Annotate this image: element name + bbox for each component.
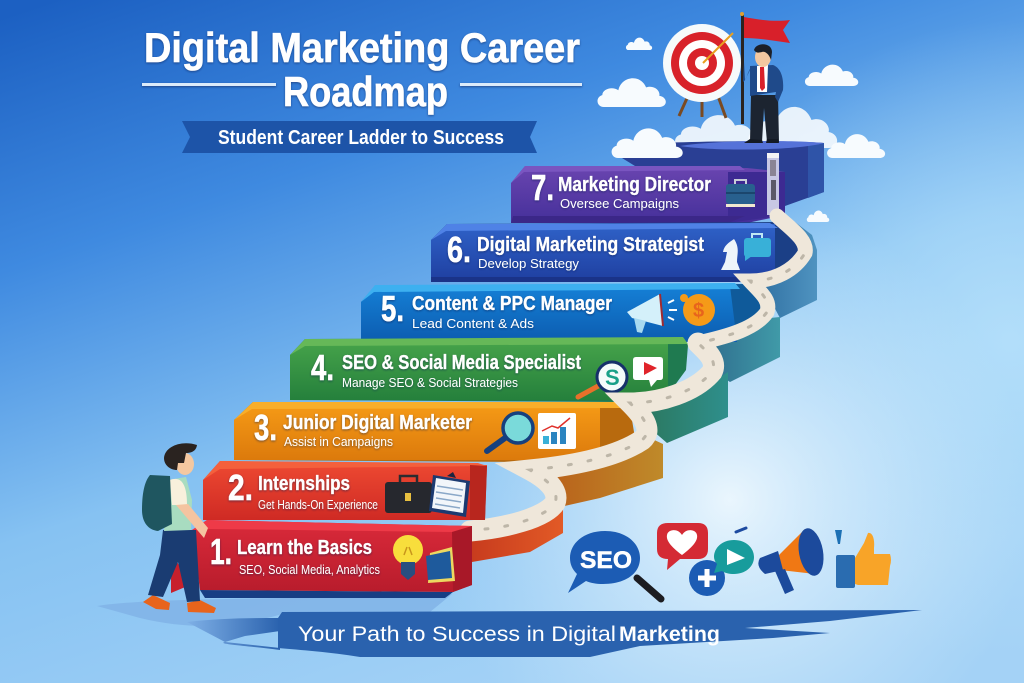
- footer ribbon: Marketing: [619, 623, 720, 646]
- target on easel: [663, 24, 741, 118]
- label: Develop Strategy: [478, 256, 579, 271]
- label: 3.: [254, 407, 277, 448]
- title: Digital Marketing Career: [144, 24, 580, 71]
- label: 1.: [210, 531, 232, 572]
- label: Marketing Director: [558, 174, 711, 196]
- clouds: [598, 38, 858, 222]
- step 4: SEO & Social Media Specialist: [290, 337, 688, 402]
- title: Roadmap: [283, 68, 448, 115]
- icon: thumbs up: [835, 530, 891, 588]
- icon: black briefcase: [385, 476, 432, 513]
- icon: dollar coin: [680, 294, 715, 326]
- label: [447, 229, 704, 271]
- subtitle banner: Student Career Ladder to Success: [218, 127, 504, 149]
- shirt: [164, 477, 192, 531]
- label: Internships: [258, 473, 350, 495]
- label: SEO, Social Media, Analytics: [239, 562, 380, 577]
- icon: chess knight: [721, 239, 740, 270]
- icon: orange megaphone: [758, 526, 827, 594]
- label: 6.: [447, 229, 471, 270]
- icon: dollar coin: $: [693, 300, 704, 322]
- label: Oversee Campaigns: [560, 196, 680, 211]
- icon: magnifier with S: [578, 362, 627, 397]
- label: [381, 288, 612, 331]
- label: Digital Marketing Strategist: [477, 234, 704, 256]
- icon: chart card: [538, 413, 576, 449]
- step 2: Internships: [203, 461, 487, 520]
- hair: [164, 443, 197, 470]
- icon: magnifying glass: [487, 413, 533, 451]
- label: [228, 467, 378, 512]
- step 6: Digital Marketing Strategist: [431, 222, 802, 282]
- trousers: [148, 530, 200, 602]
- label: 4.: [311, 347, 334, 388]
- icon: light bulb: [393, 535, 423, 580]
- label: Lead Content & Ads: [412, 316, 535, 331]
- student walking with backpack: [142, 443, 216, 613]
- icon: megaphone: [627, 294, 677, 333]
- label: [254, 407, 472, 449]
- label: SEO & Social Media Specialist: [342, 352, 581, 374]
- icon: speech briefcase: [744, 234, 771, 261]
- icon: heart bubble: [657, 523, 708, 570]
- label: Learn the Basics: [237, 537, 372, 559]
- label: Manage SEO & Social Strategies: [342, 375, 518, 390]
- subtitle banner: [182, 121, 537, 153]
- label: [210, 531, 380, 577]
- icon: plus circle: [689, 560, 725, 596]
- label: [531, 167, 711, 211]
- step 5: Content & PPC Manager: [361, 283, 765, 342]
- arm: [176, 504, 208, 538]
- label: Content & PPC Manager: [412, 293, 612, 315]
- footer ribbon: [187, 610, 922, 657]
- label: 7.: [531, 167, 554, 208]
- flag and businessman: [740, 12, 790, 143]
- title: [142, 24, 582, 115]
- footer ribbon: Your Path to Success in Digital: [298, 623, 616, 646]
- step 1: Learn the Basics: [171, 520, 472, 598]
- step 7: Marketing Director: [511, 153, 785, 223]
- top platform: [622, 141, 824, 206]
- icon: SEO bubble with magnifier: SEO: [580, 547, 632, 574]
- label: Assist in Campaigns: [284, 434, 393, 449]
- icon: SEO bubble with magnifier: [568, 531, 661, 599]
- shoes: [143, 595, 216, 613]
- icon: magnifier with S: S: [605, 365, 620, 390]
- icon: video bubble: [633, 357, 663, 387]
- step 3: Junior Digital Marketer: [234, 402, 635, 462]
- icon: clipboard: [429, 472, 470, 517]
- head: [176, 453, 194, 475]
- backpack: [142, 475, 172, 531]
- label: [311, 347, 581, 390]
- label: Junior Digital Marketer: [283, 412, 472, 434]
- pillar: [767, 153, 779, 215]
- icon: book: [426, 547, 455, 583]
- foreground clouds: [612, 128, 885, 158]
- road side bands: [472, 222, 817, 562]
- road: [470, 216, 805, 531]
- label: 2.: [228, 467, 253, 508]
- icon: play bubble: [714, 528, 754, 574]
- label: Get Hands-On Experience: [258, 497, 378, 512]
- icon: briefcase: [726, 180, 755, 207]
- ground shadow: [97, 594, 452, 626]
- label: 5.: [381, 288, 404, 329]
